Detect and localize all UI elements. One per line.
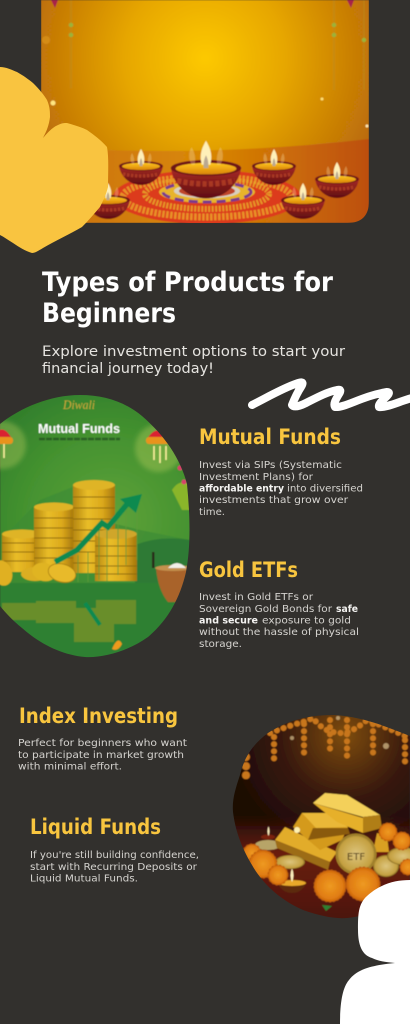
decorative white scribble bbox=[252, 382, 410, 407]
diya lamps bbox=[86, 141, 359, 219]
text: Gold ETFs description: and secure bbox=[199, 616, 258, 626]
palm foliage bbox=[172, 466, 190, 510]
background hills bbox=[2, 488, 174, 583]
text: Index Investing description bbox=[18, 738, 187, 772]
title bbox=[42, 267, 334, 329]
marigolds bbox=[243, 823, 410, 902]
decorative yellow blob bbox=[0, 67, 108, 253]
logo: Diwali bbox=[62, 398, 95, 412]
decorative white blob bbox=[340, 880, 410, 1024]
gold bars bbox=[275, 793, 389, 870]
growth arrow bbox=[55, 503, 128, 562]
text: Mutual Funds description: affordable entry bbox=[199, 484, 284, 494]
text: Mutual Funds description bbox=[199, 460, 363, 518]
heading: Index Investing: Index Investing bbox=[19, 704, 178, 728]
candles bbox=[255, 826, 306, 893]
small coins bbox=[275, 847, 410, 877]
image: Mutual Funds gold coins bbox=[0, 390, 192, 660]
text: Gold ETFs description: safe bbox=[336, 604, 358, 615]
image heading: Mutual Funds bbox=[38, 421, 120, 436]
text: Liquid Funds description: If you're still building confidence, bbox=[30, 850, 199, 861]
marigold garlands bbox=[246, 718, 407, 783]
heading: Mutual Funds: Mutual Funds bbox=[199, 425, 341, 449]
text: Mutual Funds description: investments that grow over bbox=[199, 495, 349, 506]
brass pot bbox=[152, 552, 191, 602]
text: Mutual Funds description: Investment Plans) for bbox=[199, 472, 314, 483]
text: Index Investing description: with minimal effort. bbox=[18, 762, 122, 772]
image: Diwali diyas on rangoli bbox=[41, 0, 369, 224]
hanging strings bbox=[42, 0, 368, 128]
ETF coin bbox=[336, 834, 376, 874]
text: Liquid Funds description: Liquid Mutual Funds. bbox=[30, 874, 138, 884]
text: Mutual Funds description: time. bbox=[199, 507, 225, 518]
text: Mutual Funds description: Invest via SIPs (Systematic bbox=[199, 460, 342, 471]
coin stacks bbox=[0, 480, 137, 589]
text: Mutual Funds description: into diversified bbox=[287, 484, 363, 494]
text: Gold ETFs description: without the hassle of physical bbox=[199, 627, 359, 638]
text: Gold ETFs description: Invest in Gold ETFs or bbox=[199, 592, 314, 603]
text: Gold ETFs description: Sovereign Gold Bonds for bbox=[199, 604, 333, 615]
lanterns bbox=[0, 421, 183, 472]
heading: Liquid Funds: Liquid Funds bbox=[30, 815, 161, 839]
bokeh lights bbox=[290, 716, 389, 749]
image: gold bars, ETF coin and marigolds bbox=[230, 710, 410, 923]
ETF coin: ETF bbox=[347, 852, 365, 863]
heading: Gold ETFs: Gold ETFs bbox=[199, 558, 298, 582]
water with reflection bbox=[0, 583, 175, 648]
text: Index Investing description: to participate in market growth bbox=[18, 750, 184, 761]
text: Liquid Funds description bbox=[30, 850, 199, 884]
text: Index Investing description: Perfect for beginners who want bbox=[18, 738, 187, 749]
subtitle: Explore investment options to start your bbox=[42, 344, 345, 360]
subtitle: financial journey today! bbox=[42, 361, 214, 377]
text: Gold ETFs description bbox=[199, 592, 359, 650]
text: Liquid Funds description: start with Recurring Deposits or bbox=[30, 862, 198, 873]
title: Beginners bbox=[42, 298, 176, 329]
title: Types of Products for bbox=[42, 267, 334, 298]
text: Gold ETFs description: exposure to gold bbox=[262, 616, 351, 626]
text: Gold ETFs description: storage. bbox=[199, 639, 242, 650]
rangoli pattern bbox=[113, 170, 301, 224]
subtitle bbox=[42, 344, 345, 377]
